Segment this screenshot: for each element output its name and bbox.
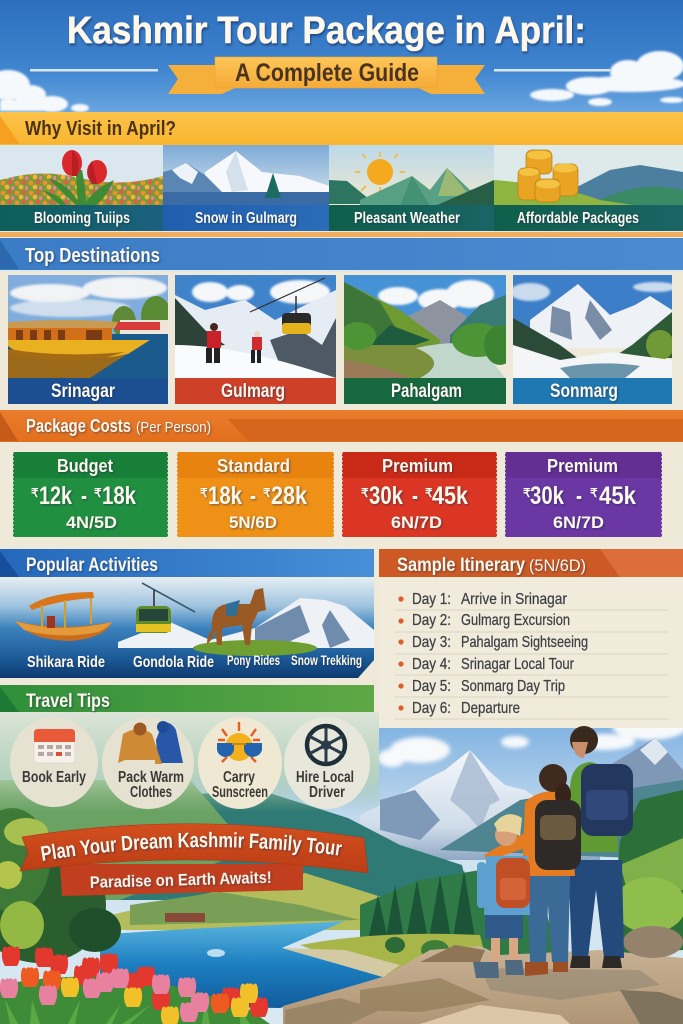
tip: hire local driver: Driver [309, 784, 345, 801]
card: standard: ₹ [200, 486, 208, 500]
heading: popular activities [0, 549, 374, 577]
landscape illustration [0, 712, 683, 1024]
panel: destinations [8, 275, 677, 404]
panel: travel tips [0, 685, 374, 809]
card: premium purple: 30k [530, 482, 564, 510]
illustration: gondola [136, 583, 195, 633]
card: Gulmarg: Gulmarg [221, 381, 285, 402]
section heading: top destinations: Top Destinations [25, 245, 160, 267]
sparkle on lake [207, 949, 225, 957]
itinerary panel [379, 549, 683, 728]
itinerary list: Day 1: [412, 591, 451, 608]
card: Srinagar: Srinagar [51, 381, 115, 402]
card: premium red: 30k [369, 482, 403, 510]
activity labels: Pony Rides [227, 653, 280, 668]
card: standard: ₹ [263, 486, 271, 500]
card: blooming tulips: Blooming Tuiips [34, 210, 130, 227]
subtitle ribbon [168, 57, 485, 94]
itinerary list: Day 4: [412, 656, 451, 673]
card: premium red: ₹ [361, 486, 369, 500]
card: budget: 12k [39, 482, 72, 510]
tip: carry sunscreen: Carry [223, 769, 255, 786]
tip: carry sunscreen [198, 717, 282, 809]
section heading: package costs: (Per Person) [136, 420, 211, 436]
card: Gulmarg [175, 275, 336, 404]
tulips foreground [0, 946, 270, 1024]
card: standard: 5N/6D [229, 513, 277, 532]
card: blooming tulips [0, 145, 163, 231]
mountains [0, 738, 683, 900]
section heading: top destinations [0, 238, 683, 270]
card: premium purple [505, 452, 662, 537]
orange divider strip [0, 232, 683, 237]
itinerary list: Pahalgam Sightseeing [461, 634, 588, 651]
panel: popular activities [0, 549, 374, 678]
card: pleasant weather: Pleasant Weather [354, 210, 460, 227]
card: Sonmarg [510, 275, 677, 404]
activity labels: Snow Trekking [291, 653, 362, 668]
man [566, 726, 633, 968]
heading: sample itinerary [379, 549, 683, 577]
card: premium red: Premium [382, 455, 453, 476]
itinerary list: Day 6: [412, 700, 451, 717]
card: premium red: ₹ [425, 486, 433, 500]
itinerary list: Sonmarg Day Trip [461, 678, 565, 695]
section heading: why visit in April [0, 112, 683, 145]
section heading: package costs: Package Costs [26, 415, 131, 436]
header: sky title area [0, 0, 683, 113]
hills and forest [110, 790, 683, 975]
tip: carry sunscreen: Sunscreen [212, 784, 268, 801]
section heading: why visit in April: Why Visit in April? [25, 118, 176, 140]
itinerary list: Day 5: [412, 678, 451, 695]
itinerary list: Arrive in Srinagar [461, 591, 568, 608]
title: Kashmir Tour Package in April: [67, 10, 586, 52]
icon: right clouds [530, 51, 683, 106]
section heading: package costs [0, 410, 683, 442]
tip: hire local driver [284, 717, 370, 809]
travel tips backdrop [0, 712, 379, 812]
illustration: shikara boat [15, 592, 112, 641]
tip: hire local driver: Hire Local [296, 769, 354, 786]
card: premium purple: ₹ [590, 486, 598, 500]
card: budget: Budget [57, 455, 113, 476]
tip: pack warm clothes: Clothes [130, 784, 172, 801]
activity labels: Gondola Ride [133, 654, 214, 671]
card: premium red: 45k [432, 482, 468, 510]
tip: book early [10, 717, 98, 807]
heading: popular activities: Popular Activities [26, 555, 158, 576]
card: Pahalgam: Pahalgam [391, 381, 462, 402]
card: premium purple: 6N/7D [553, 513, 604, 532]
itinerary list: Day 3: [412, 634, 451, 651]
card: premium purple: - [576, 482, 582, 510]
card: premium red: 6N/7D [391, 513, 442, 532]
card: Srinagar [8, 275, 171, 404]
itinerary list: Gulmarg Excursion [461, 612, 570, 629]
activity labels: Shikara Ride [27, 654, 105, 671]
illustration: grass [193, 640, 317, 656]
heading: sample itinerary: Sample Itinerary [397, 555, 525, 576]
rocks [283, 926, 683, 1024]
lake [100, 921, 383, 1008]
call to action banner [20, 824, 368, 896]
card: standard [177, 452, 334, 537]
itinerary list: Day 2: [412, 612, 451, 629]
tip: pack warm clothes: Pack Warm [118, 769, 184, 786]
subtitle ribbon: A Complete Guide [235, 59, 419, 87]
card: Pahalgam [340, 275, 516, 404]
card: standard: 18k [208, 482, 242, 510]
card: standard: - [250, 482, 256, 510]
card: premium purple: 45k [599, 482, 636, 510]
illustration: horse [207, 588, 266, 645]
card: pleasant weather [329, 145, 494, 231]
card: budget: ₹ [94, 486, 102, 500]
heading: travel tips: Travel Tips [26, 690, 110, 712]
clouds [379, 728, 683, 770]
woman [484, 764, 581, 976]
heading: sample itinerary: (5N/6D) [529, 556, 586, 575]
card: budget [13, 452, 168, 537]
card: budget: 18k [102, 482, 136, 510]
card: premium purple: ₹ [523, 486, 531, 500]
family illustration [473, 726, 633, 978]
itinerary list: Departure [461, 700, 520, 717]
child [473, 814, 530, 978]
heading: travel tips [0, 685, 374, 712]
illustration: snow mountains [118, 598, 374, 648]
activity labels [27, 655, 363, 670]
card: premium purple: Premium [547, 455, 618, 476]
shore [282, 948, 400, 977]
ribbon: main [20, 824, 368, 873]
tip: book early: Book Early [22, 769, 86, 786]
card: budget: - [81, 482, 87, 510]
card: budget: ₹ [31, 486, 39, 500]
card: snow in Gulmarg [163, 145, 329, 231]
card: premium red [342, 452, 497, 537]
divider lines [30, 69, 610, 72]
card: Sonmarg: Sonmarg [550, 381, 618, 402]
card: budget: 4N/5D [66, 513, 117, 532]
tip: pack warm clothes [102, 717, 194, 809]
card: standard: 28k [271, 482, 307, 510]
ribbon: secondary [60, 864, 303, 896]
banner tagline: Paradise on Earth Awaits! [90, 868, 272, 892]
itinerary list [395, 591, 668, 719]
tree group left [0, 808, 121, 963]
card: premium red: - [412, 482, 418, 510]
itinerary list: Srinagar Local Tour [461, 656, 575, 673]
card: standard: Standard [217, 455, 290, 476]
panel: package cost cards [13, 452, 662, 537]
icon: left clouds [0, 70, 89, 112]
panel: why visit image strip [0, 145, 683, 231]
banner headline: Plan Your Dream Kashmir Family Tour [40, 832, 344, 863]
card: affordable packages [494, 145, 683, 231]
card: affordable packages: Affordable Packages [517, 210, 639, 227]
card: snow in Gulmarg: Snow in Gulmarg [195, 210, 297, 227]
